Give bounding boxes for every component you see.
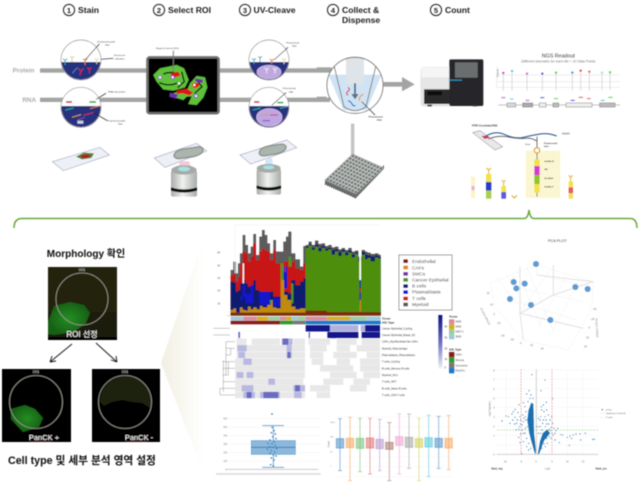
single box plot: 100 (223, 461, 228, 463)
probe highlight panel: Photocleavable (544, 142, 557, 145)
tissue and AOI legend: 6495 (455, 325, 462, 329)
UV-cleave protein circle (248, 40, 300, 82)
NGS title (521, 53, 596, 64)
PCA axis labels: -20 (501, 334, 505, 338)
tissue and AOI legend: CD3+ (455, 353, 463, 357)
step 1 heading (63, 4, 99, 16)
volcano plot: 5 (551, 461, 553, 463)
PCA axis labels: 10 (490, 302, 493, 306)
protein stain callouts: Fluorescent (114, 54, 126, 57)
volcano plot: 6 (493, 389, 495, 391)
PCA axis labels: -30 (510, 338, 514, 342)
cell type composition figure (213, 225, 468, 397)
RNA stain callouts: RNAscope probes (108, 90, 125, 93)
protein stain callouts: UV-photocleavable (97, 40, 116, 43)
volcano plot: 2 (493, 426, 495, 428)
PanCK positive image (2, 369, 71, 442)
UV-cleave protein callout (274, 41, 300, 60)
volcano axis labels: Rank_neg (491, 469, 503, 471)
step 5 heading (430, 4, 470, 16)
heatmap: Myeloid_DCs (382, 373, 398, 377)
PCA axis labels: -20 (591, 317, 595, 321)
single box plot: 600 (223, 419, 228, 421)
protein stain callouts (85, 40, 126, 60)
PCA axis labels: 10 (530, 343, 533, 347)
probe variants (471, 168, 573, 199)
dendrogram (213, 328, 235, 395)
PCA axis labels: -10 (497, 321, 501, 325)
RNA stain circle (60, 87, 126, 129)
PanCK negative image: PanCK - (125, 433, 154, 442)
UV-cleave RNA callout: oligo (289, 91, 294, 93)
step 2 heading (153, 4, 211, 16)
volcano plot: 0 (493, 455, 495, 457)
heatmap (213, 326, 419, 397)
cell type legend (399, 255, 452, 310)
probe highlight panel: UMI (544, 169, 548, 171)
UV-cleave protein callout: Photocleaved (286, 41, 300, 44)
heatmap: B cells_Memory B cells (382, 366, 410, 370)
single box plot: 0 (225, 469, 227, 471)
RNA track (22, 97, 330, 104)
RNA stain callouts: oligo (118, 123, 123, 125)
PCA axis labels (479, 291, 600, 350)
PCA plot (479, 239, 600, 350)
NGS readout (495, 53, 620, 107)
FFPE slide: FFPE Crosslinked RNA (472, 124, 498, 127)
heatmap color scale: 30 (444, 335, 448, 339)
ROI image: ROI 선정 (66, 329, 98, 339)
tissue and AOI legend: Geometric (455, 363, 468, 367)
stacked bar chart: 80 (217, 251, 221, 255)
ROI image (48, 267, 117, 340)
tissue and AOI legend: Tissue (449, 315, 458, 319)
workflow illustrations, steps 4 and 5 (317, 53, 620, 199)
UV-cleave RNA callout (272, 87, 297, 105)
tissue and AOI legend: 3945 (455, 335, 462, 339)
UV-cleave RNA circle (248, 87, 297, 129)
heatmap: Myeloid_Macrophage (382, 346, 408, 350)
step 2 heading: 2 (157, 6, 161, 15)
single box plot: 500 (223, 427, 228, 429)
PCA axis labels: 40 (584, 344, 587, 348)
NGS lollipop chart: Counts (495, 68, 499, 77)
volcano plot: 10 (566, 461, 569, 463)
PCA title: PCA PLOT (548, 239, 567, 243)
step 3 heading: UV-Cleave (254, 5, 296, 15)
tissue annotation bar (231, 316, 391, 320)
step 3 heading: 3 (243, 6, 247, 15)
heatmap: CAFs_Myofibroblast like CAFs (382, 340, 419, 344)
PCA axis labels: 0 (520, 341, 522, 345)
volcano axis labels (491, 469, 607, 471)
volcano plot (490, 369, 625, 471)
volcano legend: Significance threshold (606, 412, 625, 415)
step 1 heading: 1 (67, 6, 71, 15)
PCA axis labels: 20 (487, 291, 490, 295)
step 4 heading (327, 4, 380, 25)
single box plot: 200 (223, 453, 228, 455)
ROI callout: Region of interest (ROI) (156, 47, 179, 50)
PanCK positive image: 001 (33, 369, 40, 374)
PCA points (507, 261, 591, 323)
stacked bar chart (217, 225, 381, 316)
multi box plot (328, 414, 453, 481)
box plots (216, 414, 453, 481)
heatmap: B cells_Naive B cells (382, 386, 407, 390)
heatmap: Cancer Epithelial_Cycling (382, 326, 413, 330)
stacked bar chart: 40 (217, 276, 221, 280)
probe highlight panel (526, 137, 560, 198)
multi box plot: 10 (330, 451, 333, 453)
probe highlight panel: linker (544, 146, 549, 148)
probe schematic (471, 124, 573, 199)
RNA strand (485, 133, 557, 138)
cell type legend: B cells (412, 284, 427, 290)
stacked bar chart: 60 (217, 263, 221, 267)
volcano plot: 0 (535, 461, 537, 463)
AOI type annotation bar (231, 320, 395, 324)
tissue and AOI legend: PanCK+ (455, 369, 466, 373)
arrow to PanCK negative (96, 343, 117, 362)
PanCK positive image: PanCK + (29, 433, 60, 442)
cell type legend: SMCs (412, 271, 426, 277)
probe highlight panel: SLAMA-1T (544, 186, 554, 189)
heatmap: Cancer Epithelial_Basal_SC (382, 333, 415, 337)
PCA axis labels: -40 (593, 307, 597, 311)
PCA axis labels: PC2(21.33%)(2) (594, 318, 600, 338)
stacked bar chart: 10 (217, 301, 221, 305)
step 3 heading (239, 4, 296, 16)
heatmap color scale: 10 (444, 357, 448, 361)
PCA axis labels: 20 (586, 336, 589, 340)
morphology panel (2, 247, 160, 467)
cell type caption: Cell type 및 세부 분석 영역 설정 (8, 454, 156, 467)
PCA axis labels: PC3(16.54%)(3) (479, 307, 492, 326)
single box plot: 300 (223, 444, 228, 446)
UV-cleave RNA callout: Photocleaved (283, 87, 297, 90)
tissue and AOI legend: 6497-1 (455, 330, 464, 334)
probe highlight panel: SLAMA-1B (544, 160, 554, 163)
RNA track: RNA (22, 97, 36, 104)
green bracket (14, 210, 637, 228)
AOI type annotation bar: AOI_Type (382, 320, 395, 324)
step 5 heading: 5 (434, 6, 438, 15)
select ROI slide and objective (154, 143, 207, 197)
step 4 heading: Dispense (342, 15, 380, 25)
tissue and AOI legend (449, 315, 468, 373)
exon strand (488, 132, 570, 146)
workflow illustrations, steps 1 to 3 (13, 40, 330, 197)
cell type legend: Endothelial (412, 259, 436, 265)
morphology heading: Morphology 확인 (47, 247, 125, 260)
step 1 heading: Stain (78, 5, 99, 15)
step 5 heading: Count (445, 5, 470, 15)
protein stain callouts: oligo (105, 44, 110, 46)
PCA axis labels: 20 (541, 346, 544, 350)
step 2 heading: Select ROI (168, 5, 211, 15)
gene tile track (498, 97, 620, 107)
volcano plot: 3 (493, 417, 495, 419)
sequencer instrument (421, 59, 483, 106)
ROI tissue panel (147, 47, 219, 113)
step 4 heading: 4 (331, 6, 336, 15)
single box plot (216, 414, 321, 474)
cell type legend: Plasmablasts (412, 290, 441, 296)
UV-cleave slide and objective (240, 140, 297, 195)
PCA axis labels: 0 (493, 312, 495, 316)
tissue and AOI legend: AOI_Type (449, 347, 462, 351)
volcano axis labels: Rank_pos (596, 469, 607, 471)
volcano plot: 15 (582, 461, 585, 463)
PanCK negative image (92, 369, 160, 442)
heatmap: T cells_CD4 T cells (382, 393, 405, 397)
step 4 heading: Collect & (342, 5, 379, 15)
collection callout (362, 102, 383, 122)
NGS title: Different barcodes for each tile = 10 Data Points (521, 60, 596, 64)
cell type legend: Cancer Epithelial (412, 277, 448, 283)
volcano plot: -10 (503, 461, 507, 463)
heatmap color scale: 40 (444, 324, 448, 328)
RNA stain callouts (95, 90, 126, 125)
collection tube magnifier (317, 57, 383, 122)
tissue and AOI legend: Stroma (455, 358, 464, 362)
volcano axis labels: Log2 (545, 469, 551, 471)
NGS title: NGS Readout (542, 53, 575, 59)
ROI image: 001 (79, 267, 86, 272)
heatmap: T cells_NKT (382, 380, 397, 384)
collection callout: oligo (377, 120, 382, 122)
protein track: Protein (13, 68, 35, 75)
volcano legend: P value (606, 417, 613, 419)
protein track (13, 68, 330, 75)
volcano plot: 1 (493, 436, 495, 438)
RNA stain callouts: UV-photocleavable (107, 119, 126, 122)
heatmap color scale (438, 315, 448, 369)
protein stain callouts: antibodies (115, 57, 125, 60)
zoom fan shape (161, 240, 203, 472)
multi box plot: 100 (330, 436, 334, 438)
multi box plot: Count (328, 441, 331, 447)
volcano plot: -5 (520, 461, 523, 463)
collection callout: Photocleaved (369, 115, 383, 118)
tissue and AOI legend: 6405 (455, 320, 462, 324)
protein stain circle (60, 40, 126, 82)
stacked bar chart: 20 (217, 289, 221, 293)
UV-cleave protein callout: oligo (292, 45, 297, 47)
volcano plot: -log10 (pvalue) (490, 401, 492, 417)
heatmap: T cells_Cycling (382, 360, 400, 364)
volcano plot: 4 (493, 408, 495, 410)
exon strand: AAAAA (562, 132, 570, 135)
well plate and capillary (325, 124, 384, 198)
PCA grid (490, 265, 593, 350)
arrow to PanCK positive (50, 344, 72, 362)
volcano plot: 5 (493, 398, 495, 400)
volcano legend (600, 408, 625, 419)
heatmap color scale: 20 (444, 346, 448, 350)
cell type legend: T cells (412, 296, 426, 302)
volcano legend: ttl Test (606, 408, 612, 411)
PCA and volcano plots (479, 239, 625, 471)
heatmap color scale: 0 (444, 365, 446, 369)
cell type legend: CAFs (412, 265, 425, 271)
probe highlight panel: RandMol8 (544, 178, 553, 180)
PCA axis labels: 0 (588, 326, 590, 330)
step headings (63, 4, 470, 25)
multi box plot: 1 (330, 466, 332, 468)
volcano plot: 8 (493, 370, 495, 372)
heatmap: Plasmablasts_Plasmablasts (382, 353, 416, 357)
exon strand: Exon (525, 144, 531, 146)
single box plot: 400 (223, 436, 228, 438)
tissue annotation bar: Tissue (382, 316, 391, 320)
PanCK negative image: 001 (122, 369, 129, 374)
cell type legend: Myeloid (412, 302, 429, 308)
volcano plot: 7 (493, 380, 495, 382)
arrow to sequencer (383, 77, 415, 91)
stained slide (52, 147, 109, 171)
multi box plot: 1000 (330, 422, 336, 424)
